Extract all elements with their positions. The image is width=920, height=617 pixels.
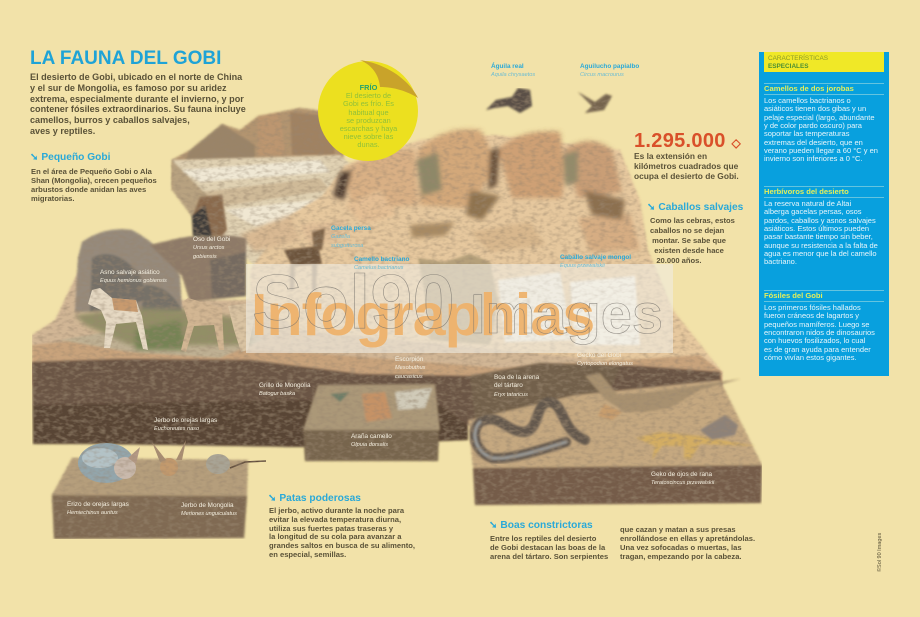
heading: Pequeño Gobi: ➘ Pequeño Gobi	[30, 152, 110, 163]
side: herbívoros: pasar bastante tiempo sin beber,	[764, 232, 873, 241]
side panel header: CARACTERÍSTICAS	[768, 55, 828, 62]
side: herbívoros	[764, 186, 884, 267]
text: Boas column 1: Entre los reptiles del desierto	[490, 534, 596, 543]
heading: Boas constrictoras: ➘ Boas constrictoras	[489, 520, 593, 531]
side: herbívoros: pardos, caballos y asnos salvajes	[764, 216, 876, 225]
label: Boa	[494, 374, 540, 398]
side: camellos: extremas del desierto, que en	[764, 138, 863, 147]
side: fósiles: encontraron nidos de dinosaurios	[764, 328, 875, 337]
text: Caballos salvajes: montar. Se sabe que	[652, 236, 726, 245]
label: Erizo de orejas largas: Hemiechinus auritus	[67, 510, 118, 516]
text: extensión	[634, 151, 739, 181]
gecko	[585, 373, 740, 420]
label: Gecko del Gobi: Gecko del Gobi	[577, 352, 621, 359]
label: Gacela persa: subgutturosa	[331, 243, 363, 249]
text: Patas poderosas: El jerbo, activo durante la noche para	[269, 506, 404, 515]
label: Geko de ojos de rana: Teratoscincus przewalskii	[651, 480, 714, 486]
side: herbívoros: asiáticos. Estos últimos pueden	[764, 224, 869, 233]
text: Caballos salvajes: existen desde hace	[654, 246, 724, 255]
label: Jerbo de Mongolia: Meriones unguiculatus	[181, 511, 237, 517]
side: camellos: y de color pardo oscuro) para	[764, 121, 862, 130]
text: Patas poderosas: grandes saltos en busca de su alimento,	[269, 541, 415, 550]
label: Gecko del Gobi: Cyrtopodion elongatus	[577, 361, 633, 367]
rocks at left	[75, 229, 246, 318]
sticker: Frío: dunas.	[357, 140, 380, 149]
label: Jerbo de orejas largas: Jerbo de orejas largas	[154, 417, 217, 424]
label: Jerbo de Mongolia	[181, 502, 237, 517]
side: fósiles	[764, 290, 884, 362]
label: Aguilucho papialbo: Aguilucho papialbo	[580, 63, 639, 70]
sticker: Frío: FRÍO	[360, 83, 377, 92]
side: camellos: asiáticos tienen dos gibas y un	[764, 104, 866, 113]
side: camellos: Camellos de dos jorobas	[764, 84, 854, 93]
sticker: Frío: escarchas y haya	[340, 124, 397, 133]
label: Caballo salvaje mongol	[560, 254, 631, 269]
label: Asno salvaje asiático: Asno salvaje asiático	[100, 269, 160, 276]
label: Águila real: Aquila chrysaetos	[491, 72, 535, 78]
side: fósiles: con huevos fosilizados, lo cual	[764, 336, 865, 345]
insects block	[303, 384, 440, 461]
label: Oso del Gobi: Oso del Gobi	[193, 236, 230, 243]
label: Araña camello: Olpuia dorsalis	[351, 442, 388, 448]
camels and horses	[284, 228, 640, 345]
side: fósiles: cómo vivían estos gigantes.	[764, 353, 857, 362]
side: camellos: Los camellos bactrianos o	[764, 96, 851, 105]
sticker: Frío: Gobi es frío. Es	[343, 99, 394, 108]
central rocks and sand	[250, 135, 722, 400]
sticker: Frío: El desierto de	[346, 91, 391, 100]
label: Escorpión: caucasicus	[395, 374, 423, 380]
label: Aguilucho papialbo: Circus macrourus	[580, 72, 624, 78]
intro text: extrema, especialmente durante el invierno, y por	[30, 94, 244, 104]
grass	[75, 308, 250, 350]
side panel header	[764, 52, 884, 72]
text: Patas poderosas: utiliza sus fuertes patas traseras y	[269, 524, 393, 533]
side: camellos: verano pueden llegar a 60 °C y en	[764, 146, 878, 155]
text: Boas column 1: arena del tártaro. Son serpientes	[490, 552, 608, 561]
boa	[475, 402, 585, 458]
label: Jerbo de orejas largas: Euchoreutes naso	[154, 426, 199, 432]
label: Camello bactriano	[354, 256, 410, 271]
text: Boas column 2: que cazan y matan a sus presas	[620, 525, 736, 534]
watermark: Infographias: Infographias	[251, 282, 594, 348]
frog eyed gecko	[636, 415, 755, 460]
label: Jerbo de orejas largas	[154, 417, 217, 432]
label: Oso del Gobi	[193, 236, 230, 260]
text: Pequeño Gobi: arbustos donde anidan las aves	[31, 185, 146, 194]
side: fósiles: Los primeros fósiles hallados	[764, 303, 861, 312]
label: Gecko del Gobi	[577, 352, 633, 367]
side: camellos: invierno son inferiores a 0 °C.	[764, 154, 862, 163]
text: extensión: ocupa el desierto de Gobi.	[634, 171, 739, 181]
watermark band	[246, 264, 673, 353]
text: Patas poderosas: en especial, semillas.	[269, 550, 346, 559]
title: LA FAUNA DEL GOBI	[30, 48, 221, 69]
text: Boas column 2: Una vez sofocadas o muertas, las	[620, 543, 742, 552]
intro text: y el sur de Mongolia, es famoso por su aridez	[30, 83, 227, 93]
label: Escorpión: Mesobuthus	[395, 365, 425, 371]
text: extensión: kilómetros cuadrados que	[634, 161, 738, 171]
label: Araña camello	[351, 433, 392, 448]
sticker: Frío: nieve sobre las	[344, 132, 393, 141]
number: 1.295.000: 1.295.000 ◇	[634, 130, 741, 152]
label: Gacela persa	[331, 225, 371, 249]
side: herbívoros: La reserva natural de Altai	[764, 199, 851, 208]
text: Caballos salvajes: 20.000 años.	[656, 256, 702, 265]
label: Águila real	[490, 62, 535, 78]
label: Gacela persa: Gacela persa	[331, 225, 371, 232]
text: Boas column 2: tragan, empezando por la cabeza.	[620, 552, 742, 561]
credit: ©Sol 90 Images	[877, 533, 883, 572]
jerboa block	[52, 458, 248, 539]
side: camellos: pelaje especial (largo, abundante	[764, 113, 874, 122]
sticker: Frío: habitual que	[348, 108, 389, 117]
side panel header: ESPECIALES	[768, 63, 808, 70]
heading: Patas poderosas: ➘ Patas poderosas	[268, 493, 361, 504]
sticker: Frío: se produzcan	[346, 116, 391, 125]
side panel	[759, 52, 889, 376]
label: Geko de ojos de rana	[651, 471, 714, 486]
label: Escorpión: Escorpión	[395, 356, 423, 363]
label: Aguilucho papialbo	[580, 63, 639, 78]
intro text	[30, 72, 246, 136]
label: Águila real: Águila real	[491, 63, 524, 70]
label: Caballo salvaje mongol: Caballo salvaje mongol	[560, 254, 631, 261]
label: Boa: Eryx tataricus	[494, 392, 528, 398]
label: Asno salvaje asiático	[100, 269, 167, 284]
text: Caballos salvajes: caballos no se dejan	[650, 226, 724, 235]
intro text: aves y reptiles.	[30, 126, 95, 136]
intro text: El desierto de Gobi, ubicado en el norte de China	[30, 72, 242, 82]
label: Oso del Gobi: Ursus arctos	[193, 245, 224, 251]
back cliff	[172, 108, 345, 190]
jerboa animals	[78, 440, 266, 483]
intro text: camellos, burros y caballos salvajes,	[30, 115, 190, 125]
label: Grillo de Mongolia: Grillo de Mongolia	[259, 382, 311, 389]
text: Boas column 2: enrollándose en ellas y apretándolas.	[620, 534, 755, 543]
label: Asno salvaje asiático: Equus hemionus gobiensis	[100, 278, 167, 284]
text: Boas column 2	[620, 525, 755, 561]
side: fósiles: es de gran ayuda para entender	[764, 345, 871, 354]
label: Erizo de orejas largas: Erizo de orejas largas	[67, 501, 129, 508]
side: fósiles: fueron cráneos de lagartos y	[764, 311, 859, 320]
label: Jerbo de Mongolia: Jerbo de Mongolia	[181, 502, 234, 509]
text: Pequeño Gobi: migratorias.	[31, 194, 74, 203]
label: Oso del Gobi: gobiensis	[193, 254, 217, 260]
side: herbívoros: Herbívoros del desierto	[764, 187, 849, 196]
soil cross section	[32, 359, 722, 447]
side: camellos: soportar las temperaturas	[764, 129, 849, 138]
label: Boa: Boa de la arena	[494, 374, 539, 381]
kiangs	[88, 288, 256, 352]
text: Caballos salvajes: Como las cebras, estos	[650, 216, 735, 225]
label: Gacela persa: Gazella	[331, 234, 350, 240]
side: herbívoros: bactriano.	[764, 257, 797, 266]
side: herbívoros: alberga gacelas persas, osos	[764, 207, 862, 216]
text: Patas poderosas	[269, 506, 415, 559]
label: Grillo de Mongolia	[259, 382, 311, 397]
label: Grillo de Mongolia: Batogur baska	[259, 391, 295, 397]
ground surface	[32, 272, 722, 385]
intro text: contener fósiles extraordinarios. Su fauna incluye	[30, 104, 246, 114]
text: Patas poderosas: evitar la elevada temperatura diurna,	[269, 515, 401, 524]
dune plain	[172, 155, 420, 270]
heading: Caballos salvajes: ➘ Caballos salvajes	[647, 202, 743, 213]
label: Erizo de orejas largas	[67, 501, 129, 516]
bear	[192, 195, 227, 236]
text: Boas column 1: de Gobi destacan las boas de la	[490, 543, 605, 552]
reptile block	[468, 380, 762, 505]
label: Boa: del tártaro	[494, 382, 523, 389]
label: Camello bactriano: Camelus bactrianus	[354, 265, 403, 271]
text: Caballos salvajes	[650, 216, 735, 265]
label: Camello bactriano: Camello bactriano	[354, 256, 409, 263]
side: fósiles: Fósiles del Gobi	[764, 291, 823, 300]
side: fósiles: pequeños mamíferos. Luego se	[764, 320, 869, 329]
label: Geko de ojos de rana: Geko de ojos de rana	[651, 471, 712, 478]
side: camellos	[764, 83, 884, 164]
text: Pequeño Gobi: Shan (Mongolia), crecen pequeños	[31, 176, 157, 185]
label: Caballo salvaje mongol: Equus przewalskii	[560, 263, 605, 269]
text: Pequeño Gobi: En el área de Pequeño Gobi o Ala	[31, 167, 152, 176]
label: Araña camello: Araña camello	[351, 433, 392, 440]
sticker: Frío	[318, 60, 418, 161]
text: Pequeño Gobi	[31, 167, 157, 203]
side: herbívoros: agua es menor que la del camello	[764, 249, 877, 258]
text: Patas poderosas: la longitud de su cola para avanzar a	[269, 532, 402, 541]
eagles	[486, 88, 612, 113]
label: Escorpión	[395, 356, 426, 380]
text: Boas column 1	[490, 534, 608, 561]
text: extensión: Es la extensión en	[634, 151, 707, 161]
side: herbívoros: aunque su resistencia a la falta de	[764, 241, 878, 250]
